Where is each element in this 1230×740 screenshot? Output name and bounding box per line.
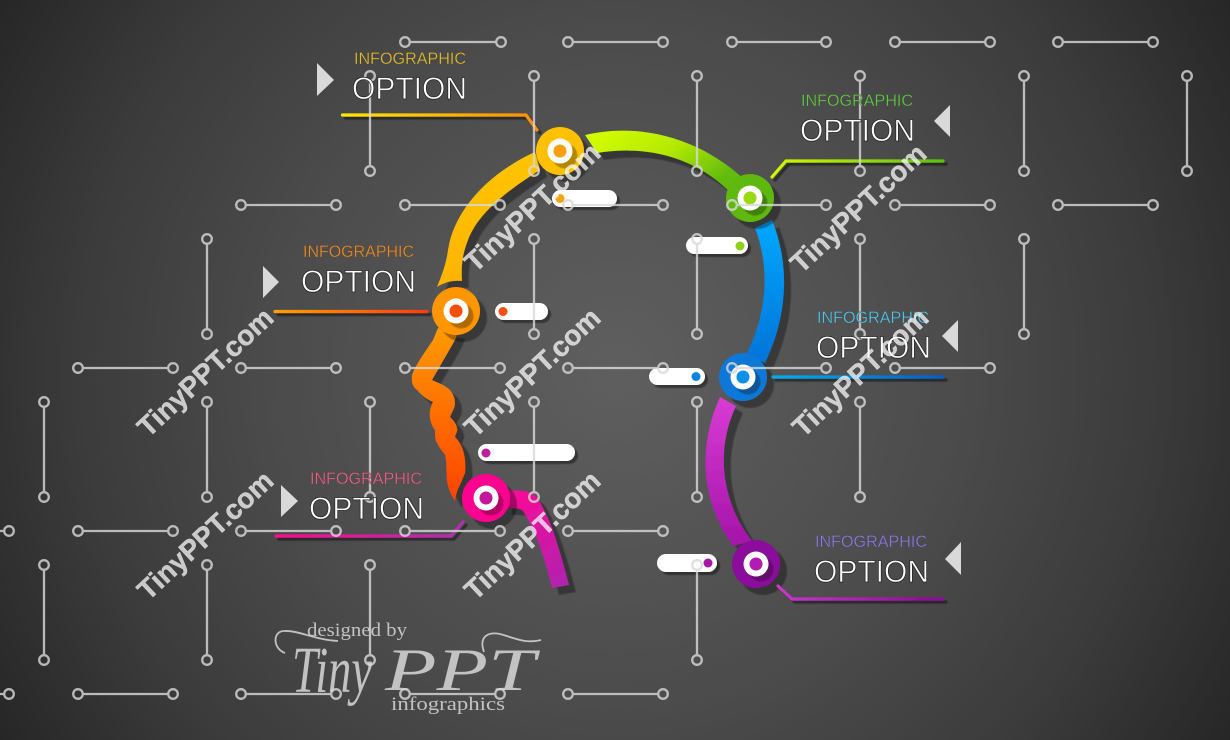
label: green option: INFOGRAPHIC (801, 91, 913, 110)
line: green (772, 161, 943, 177)
pill: orange (495, 303, 548, 320)
label: blue option (816, 308, 958, 365)
node: orange (432, 287, 480, 335)
watermarks (131, 137, 934, 606)
pill: yellow (552, 190, 617, 207)
label: yellow option (317, 49, 467, 106)
line: orange (275, 310, 427, 313)
node: green (726, 174, 774, 222)
watermarks: TinyPPT.com (786, 302, 934, 443)
watermarks: TinyPPT.com (458, 137, 606, 278)
logo: designed by TinyPPT infographics: infographics (391, 694, 505, 715)
arc: blue back of head (747, 220, 784, 363)
arc: green crown (585, 131, 745, 190)
label: blue option: INFOGRAPHIC (817, 308, 929, 327)
node: yellow (536, 127, 584, 175)
label: purple option (814, 532, 961, 589)
pill: purple (657, 554, 717, 572)
watermarks: TinyPPT.com (784, 138, 932, 279)
pill: blue (649, 368, 705, 385)
line: blue (773, 375, 943, 379)
label: blue option: OPTION (816, 329, 931, 365)
label: magenta option (281, 469, 424, 526)
watermarks: TinyPPT.com (458, 465, 606, 606)
connector lines (275, 115, 943, 599)
logo: designed by TinyPPT infographics: designed by (307, 620, 408, 641)
head outline (412, 131, 784, 588)
logo: designed by TinyPPT infographics: PPT (384, 637, 540, 703)
line: yellow (342, 115, 537, 130)
label: green option (800, 91, 950, 148)
label: magenta option: INFOGRAPHIC (310, 469, 422, 488)
line: magenta (276, 522, 463, 536)
watermarks: TinyPPT.com (131, 302, 279, 443)
label: yellow option: INFOGRAPHIC (354, 49, 466, 68)
face profile (412, 328, 465, 501)
node: blue (719, 353, 767, 401)
label: purple option: OPTION (814, 553, 929, 589)
logo: designed by TinyPPT infographics (276, 620, 541, 715)
label: yellow option: OPTION (352, 70, 467, 106)
line: purple (778, 586, 943, 599)
watermarks: TinyPPT.com (458, 302, 606, 443)
label: orange option (263, 242, 416, 299)
watermarks: TinyPPT.com (131, 465, 279, 606)
logo: designed by TinyPPT infographics: Tiny (292, 634, 372, 707)
pill: magenta (478, 444, 575, 461)
label: purple option: INFOGRAPHIC (815, 532, 927, 551)
arc: yellow forehead (437, 152, 540, 287)
node: purple (732, 540, 780, 588)
arm: magenta chin to shoulder (505, 490, 569, 588)
label: magenta option: OPTION (309, 490, 424, 526)
label: orange option: OPTION (301, 263, 416, 299)
arc: purple neck (705, 397, 752, 546)
node: magenta (462, 474, 510, 522)
label: green option: OPTION (800, 112, 915, 148)
pill: green (686, 237, 748, 254)
label: orange option: INFOGRAPHIC (303, 242, 414, 261)
